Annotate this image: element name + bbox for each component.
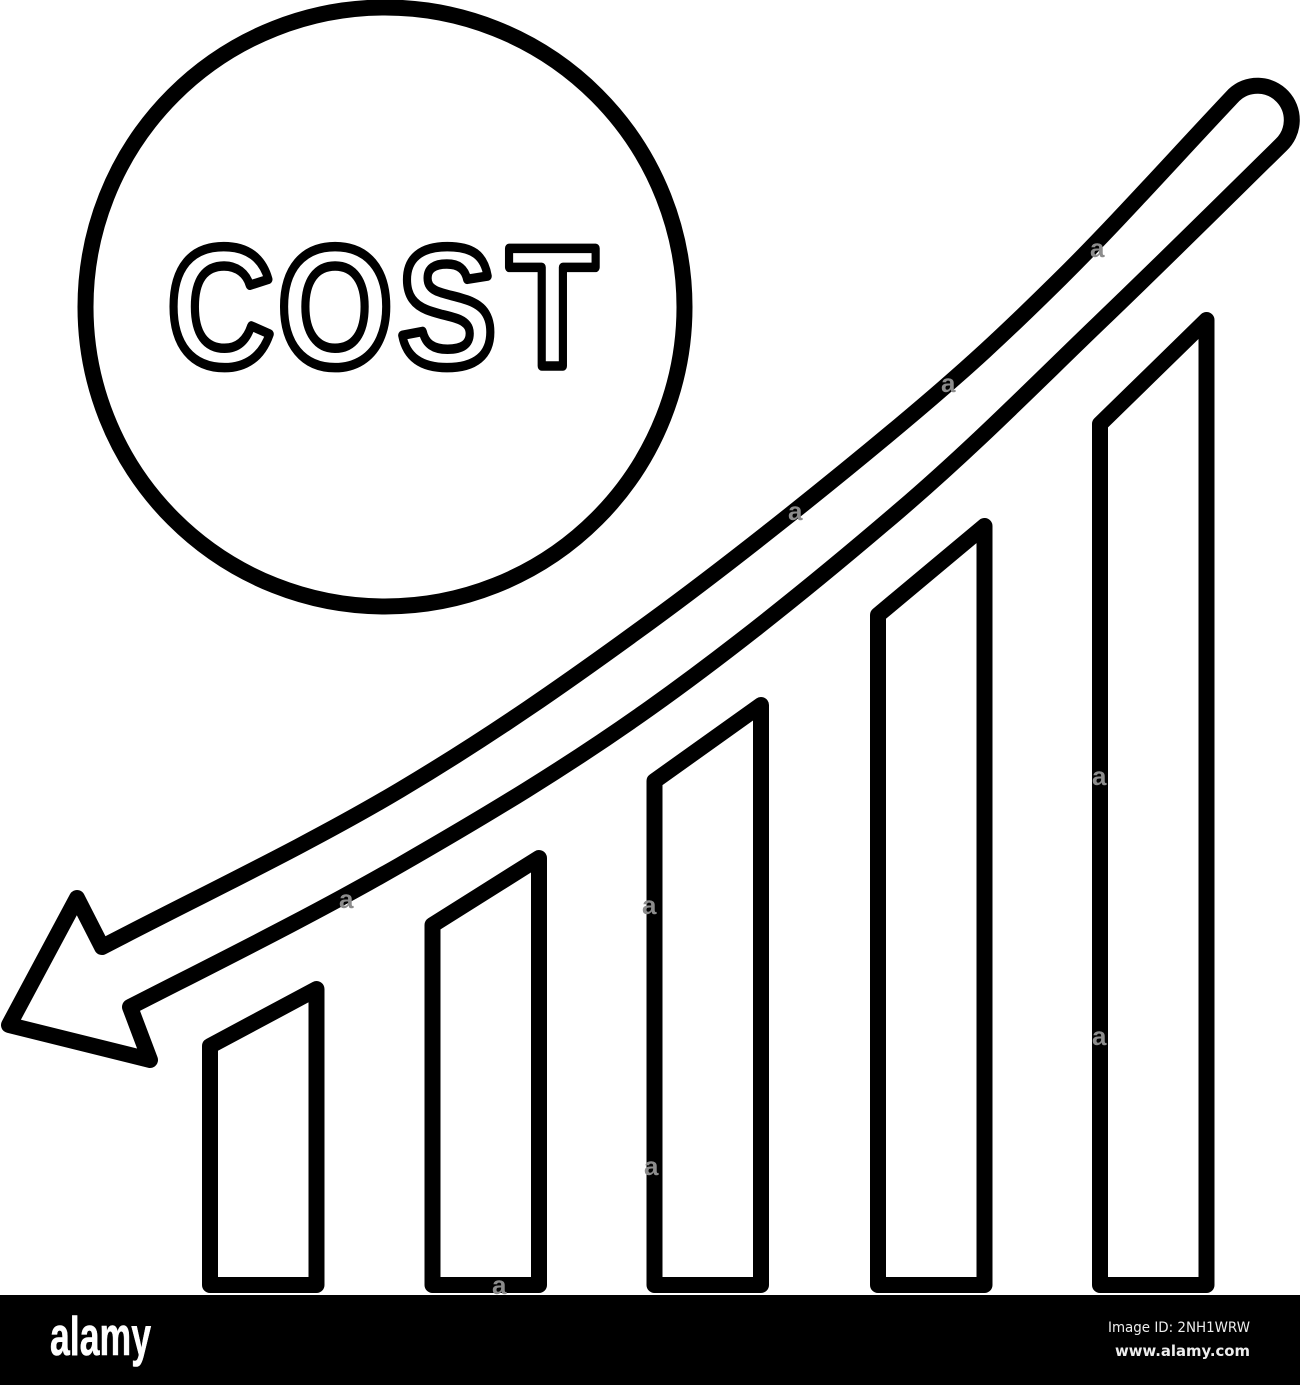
arrow: downward curved arrow [9,86,1292,1060]
watermark fragments: a [1090,233,1105,263]
watermark fragments: a [1092,1021,1107,1051]
watermark fragments: a [339,884,354,914]
watermark fragments: a [492,1270,507,1300]
logo: alamy: alamy [50,1305,151,1367]
badge: cost circle [86,8,684,606]
bar 2 [432,858,539,1285]
watermark fragments: a [644,1151,659,1181]
bar 1 [210,989,316,1285]
image id: Image ID: 2NH1WRW [1108,1320,1250,1336]
bar 4 [878,526,984,1285]
website: www.alamy.com [1115,1343,1250,1360]
footer background [0,1295,1300,1385]
bar 5 [1100,320,1206,1285]
bar 3 [654,705,761,1285]
bar chart: rising bars [210,320,1206,1285]
watermark fragments: a [941,368,956,398]
watermark fragments [339,233,1107,1300]
watermark fragments: a [788,496,803,526]
circle outline [86,8,684,606]
watermark fragments: a [642,890,657,920]
watermark fragments: a [1092,761,1107,791]
footer band [0,1295,1300,1385]
heading: COST: COST [168,212,597,402]
